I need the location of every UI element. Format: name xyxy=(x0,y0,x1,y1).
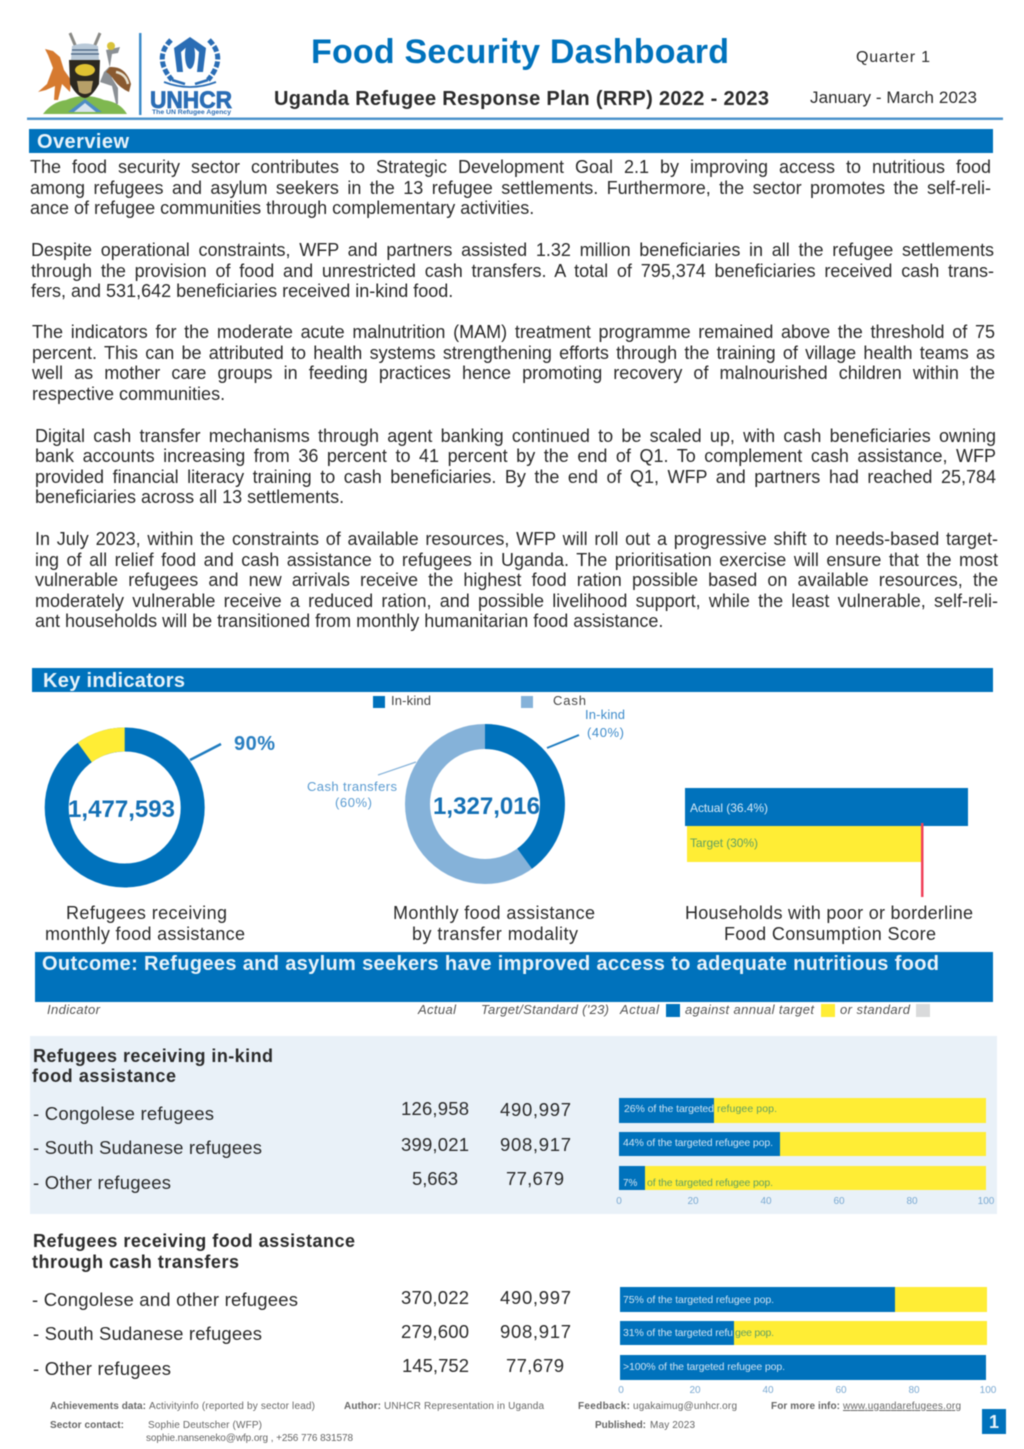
footer: credits and contacts: Sophie Deutscher (WFP) xyxy=(148,1420,262,1431)
heading: outcome banner xyxy=(35,952,993,1002)
overview paragraph 1: The food security sector contributes to Strategic Development Goal 2.1 by improving access to nutritious food xyxy=(30,157,991,177)
heading: outcome banner: Outcome: Refugees and asylum seekers have improved access to adequate nutritious food xyxy=(42,953,939,975)
overview paragraph 5 xyxy=(34,529,998,632)
footer: credits and contacts: Author: xyxy=(344,1401,381,1412)
bar chart: cash achievement: 80 xyxy=(908,1385,920,1396)
rows: in-kind indicators: - Congolese refugees xyxy=(33,1103,214,1124)
overview paragraph 2: fers, and 531,642 beneficiaries received in-kind food. xyxy=(31,281,453,301)
table header and legend xyxy=(47,1002,930,1017)
rows: cash indicators: - South Sudanese refugees xyxy=(33,1323,262,1344)
bar chart: in-kind achievement: refugee pop. xyxy=(717,1103,777,1115)
donut chart: refugees receiving monthly food assistance xyxy=(57,728,275,876)
table header and legend: against annual target xyxy=(685,1002,815,1017)
overview paragraph 4: beneficiaries across all 13 settlements. xyxy=(35,487,344,507)
rows: cash indicators: - Congolese and other refugees xyxy=(32,1289,298,1310)
title: Food Security Dashboard xyxy=(311,33,729,71)
rows: cash indicators: 908,917 xyxy=(500,1321,571,1342)
overview paragraph 3: well as mother care groups in feeding practices hence promoting recovery of malnourished children within the xyxy=(32,363,995,383)
heading: cash transfer assistance: Refugees receiving food assistance xyxy=(33,1231,355,1251)
rows: cash indicators: 370,022 xyxy=(401,1287,469,1308)
bar chart: in-kind achievement: 44% of the targeted refugee pop. xyxy=(623,1137,773,1149)
rows: cash indicators: 490,997 xyxy=(500,1287,571,1308)
bar chart: in-kind achievement: 20 xyxy=(687,1196,699,1207)
footer: credits and contacts: Activityinfo (reported by sector lead) xyxy=(149,1401,315,1412)
page number xyxy=(982,1409,1006,1434)
heading: in-kind assistance: food assistance xyxy=(32,1066,176,1086)
bar chart: cash achievement: >100% of the targeted refugee pop. xyxy=(623,1361,785,1373)
rows: in-kind indicators: 126,958 xyxy=(401,1098,469,1119)
caption: refugees receiving food: Refugees receiving xyxy=(66,903,227,923)
bar chart: cash achievement xyxy=(618,1287,997,1396)
bar chart: in-kind achievement: 7% xyxy=(623,1178,638,1189)
overview paragraph 5: moderately vulnerable receive a reduced ration, and possible livelihood support, while the least vulnerable, self-reli- xyxy=(35,591,998,611)
footer: credits and contacts xyxy=(50,1401,961,1444)
overview paragraph 3 xyxy=(31,322,996,405)
overview paragraph 5: ing of all relief food and cash assistance to refugees in Uganda. The prioritisation exercise will ensure that the most xyxy=(35,550,998,570)
table header and legend: Indicator xyxy=(47,1002,101,1017)
bar chart: in-kind achievement: 80 xyxy=(906,1196,918,1207)
legend: transfer modality xyxy=(373,693,586,708)
caption: refugees receiving food: monthly food assistance xyxy=(45,924,245,944)
footer: credits and contacts: sophie.nanseneko@wfp.org , +256 776 831578 xyxy=(146,1433,353,1444)
page number: 1 xyxy=(989,1412,999,1432)
bar chart: in-kind achievement xyxy=(616,1098,995,1207)
caption: households food consumption score: Food Consumption Score xyxy=(724,924,936,944)
logo divider xyxy=(139,33,142,115)
logo: UNHCR: The UN Refugee Agency xyxy=(152,110,232,116)
bar chart: in-kind achievement: 26% of the targeted xyxy=(624,1103,714,1115)
footer: credits and contacts: ugakaimug@unhcr.org xyxy=(633,1401,737,1412)
caption: households food consumption score: Households with poor or borderline xyxy=(685,903,973,923)
table header and legend: Actual xyxy=(619,1002,660,1017)
bar chart: cash achievement: gee pop. xyxy=(735,1327,774,1339)
footer: credits and contacts: Sector contact: xyxy=(50,1420,124,1431)
donut chart: refugees receiving monthly food assistance: 90% xyxy=(234,733,275,755)
footer: credits and contacts: May 2023 xyxy=(650,1420,695,1431)
heading: overview: Overview xyxy=(37,131,129,153)
heading: key indicators: Key indicators xyxy=(43,670,185,692)
footer: credits and contacts: Feedback: xyxy=(578,1401,630,1412)
logo: UNHCR xyxy=(150,37,232,116)
rows: cash indicators: - Other refugees xyxy=(33,1358,171,1379)
caption: transfer modality: Monthly food assistance xyxy=(393,903,595,923)
rows: in-kind indicators: 908,917 xyxy=(500,1134,571,1155)
heading: in-kind assistance xyxy=(32,1046,273,1086)
caption: refugees receiving food xyxy=(45,903,245,944)
overview paragraph 3: percent. This can be attributed to health systems strengthening efforts through the training of village health teams as xyxy=(32,343,995,363)
rows: cash indicators: 279,600 xyxy=(401,1321,469,1342)
donut chart: monthly food assistance by transfer modality: (40%) xyxy=(587,725,624,740)
overview paragraph 2: through the provision of food and unrestricted cash transfers. A total of 795,374 beneficiaries received cash trans- xyxy=(31,261,994,281)
bar chart: in-kind achievement: of the targeted refugee pop. xyxy=(647,1177,773,1189)
overview paragraph 4 xyxy=(35,426,996,507)
table header and legend: Actual xyxy=(417,1002,457,1017)
donut chart: monthly food assistance by transfer modality: (60%) xyxy=(335,795,372,810)
overview paragraph 1: ance of refugee communities through complementary activities. xyxy=(30,198,534,218)
donut chart: monthly food assistance by transfer modality: Cash transfers xyxy=(307,779,398,794)
overview paragraph 3: The indicators for the moderate acute malnutrition (MAM) treatment programme remained above the threshold of 75 xyxy=(32,322,995,342)
footer: credits and contacts: www.ugandarefugees.org xyxy=(842,1401,961,1412)
overview paragraph 5: In July 2023, within the constraints of available resources, WFP will roll out a progressive shift to needs-based target- xyxy=(35,529,998,549)
bar chart: cash achievement: 20 xyxy=(689,1385,701,1396)
bar chart: food consumption score actual vs target: Target (30%) xyxy=(690,836,758,850)
donut chart: monthly food assistance by transfer modality: In-kind xyxy=(585,707,625,722)
donut chart: monthly food assistance by transfer modality: 1,327,016 xyxy=(433,793,540,820)
overview paragraph 4: bank accounts increasing from 36 percent to 41 percent by the end of Q1. To complement cash assistance, WFP xyxy=(35,446,996,466)
heading: cash transfer assistance xyxy=(32,1231,355,1272)
quarter label: Quarter 1 xyxy=(856,49,930,66)
heading: in-kind assistance: Refugees receiving in-kind xyxy=(33,1046,273,1066)
overview paragraph 4: provided financial literacy training to cash beneficiaries. By the end of Q1, WFP and partners had reached 25,784 xyxy=(35,467,996,487)
legend: transfer modality: In-kind xyxy=(391,693,431,708)
bar chart: in-kind achievement: 0 xyxy=(616,1196,622,1207)
bar chart: cash achievement: 75% of the targeted refugee pop. xyxy=(623,1294,774,1306)
heading: key indicators xyxy=(32,668,993,692)
bar chart: cash achievement: 0 xyxy=(618,1385,624,1396)
rows: in-kind indicators: 5,663 xyxy=(412,1168,458,1189)
overview paragraph 5: vulnerable refugees and new arrivals receive the highest food ration possible based on available resources, the xyxy=(35,570,998,590)
overview paragraph 5: ant households will be transitioned from monthly humanitarian food assistance. xyxy=(35,611,663,631)
date range: January - March 2023 xyxy=(810,88,977,107)
donut chart: monthly food assistance by transfer modality xyxy=(307,707,625,872)
footer: credits and contacts: Achievements data: xyxy=(50,1401,146,1412)
table header and legend: Target/Standard ('23) xyxy=(481,1002,609,1017)
caption: transfer modality: by transfer modality xyxy=(412,924,578,944)
rows: in-kind indicators: - Other refugees xyxy=(33,1172,171,1193)
rows: cash indicators xyxy=(32,1287,571,1379)
overview paragraph 2 xyxy=(30,240,994,301)
bar chart: cash achievement: 31% of the targeted refu xyxy=(623,1327,733,1339)
donut chart: refugees receiving monthly food assistance: 1,477,593 xyxy=(68,796,175,823)
heading: overview xyxy=(29,129,993,153)
bar chart: in-kind achievement: 100 xyxy=(978,1196,995,1207)
rows: cash indicators: 77,679 xyxy=(506,1355,564,1376)
rows: in-kind indicators: 399,021 xyxy=(401,1134,469,1155)
panel: in-kind food assistance xyxy=(30,1036,997,1214)
overview paragraph 3: respective communities. xyxy=(32,384,225,404)
overview paragraph 1: among refugees and asylum seekers in the 13 refugee settlements. Furthermore, the sector promotes the self-reli- xyxy=(30,178,991,198)
rows: in-kind indicators: 77,679 xyxy=(506,1168,564,1189)
bar chart: food consumption score actual vs target xyxy=(685,788,968,897)
logo: UNHCR: UNHCR xyxy=(150,87,232,114)
bar chart: in-kind achievement: 60 xyxy=(833,1196,845,1207)
table header and legend: or standard xyxy=(840,1002,911,1017)
overview paragraph 4: Digital cash transfer mechanisms through agent banking continued to be scaled up, with cash beneficiaries owning xyxy=(35,426,996,446)
footer: credits and contacts: UNHCR Representation in Uganda xyxy=(384,1401,544,1412)
bar chart: cash achievement: 100 xyxy=(980,1385,997,1396)
header rule xyxy=(27,118,1003,120)
subtitle: Uganda Refugee Response Plan (RRP) 2022 - 2023 xyxy=(274,88,769,110)
rows: in-kind indicators: - South Sudanese refugees xyxy=(33,1137,262,1158)
caption: transfer modality xyxy=(393,903,595,944)
overview paragraph 2: Despite operational constraints, WFP and partners assisted 1.32 million beneficiaries in all the refugee settlements xyxy=(31,240,994,260)
overview paragraph 1 xyxy=(30,157,991,219)
icon: Uganda coat of arms xyxy=(38,33,131,114)
footer: credits and contacts: Published: xyxy=(595,1420,646,1431)
heading: cash transfer assistance: through cash transfers xyxy=(32,1252,239,1272)
bar chart: cash achievement: 60 xyxy=(835,1385,847,1396)
rows: in-kind indicators: 490,997 xyxy=(500,1099,571,1120)
legend: transfer modality: Cash xyxy=(553,693,586,708)
bar chart: in-kind achievement: 40 xyxy=(760,1196,772,1207)
rows: in-kind indicators xyxy=(33,1098,571,1193)
caption: households food consumption score xyxy=(685,903,973,944)
footer: credits and contacts: For more info: xyxy=(771,1401,840,1412)
rows: cash indicators: 145,752 xyxy=(402,1355,469,1376)
bar chart: food consumption score actual vs target: Actual (36.4%) xyxy=(690,801,768,815)
bar chart: cash achievement: 40 xyxy=(762,1385,774,1396)
